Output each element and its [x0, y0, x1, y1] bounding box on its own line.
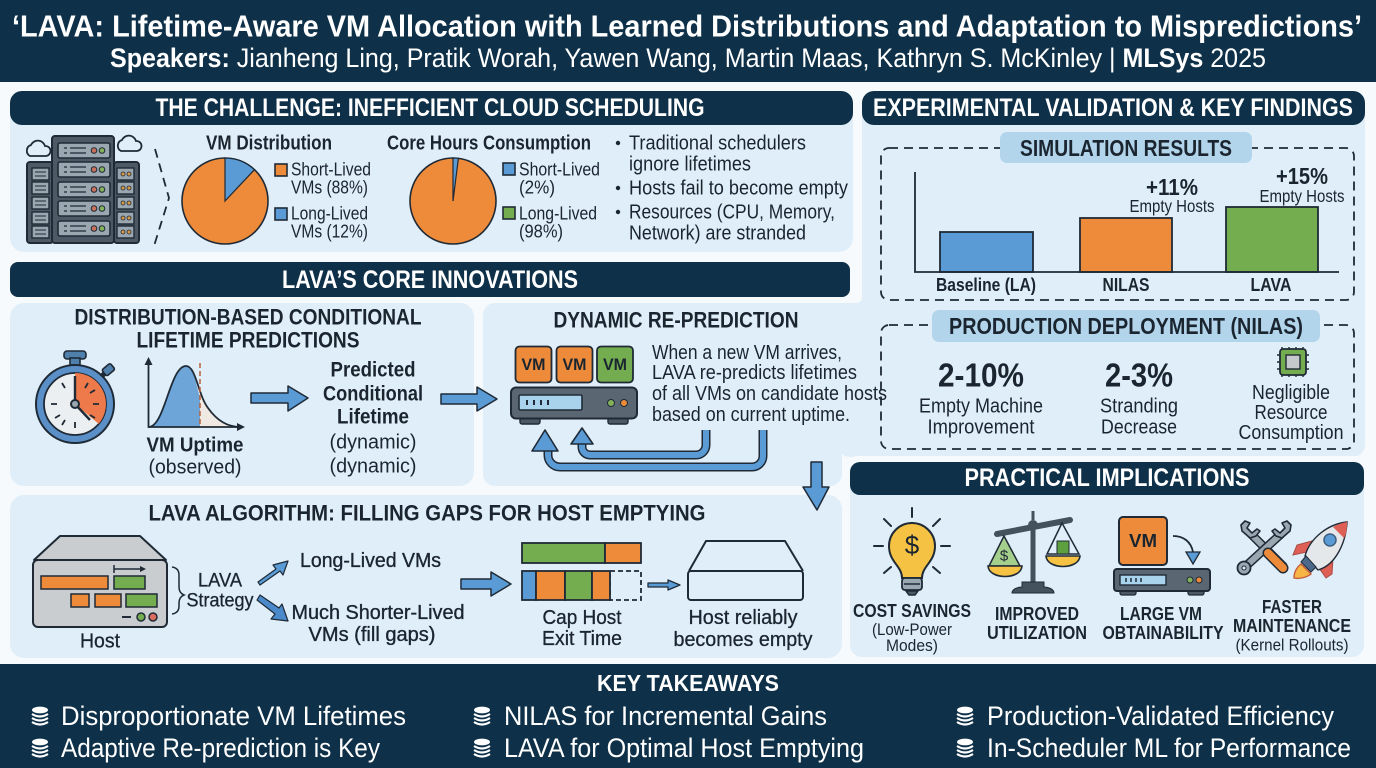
icon: host with allocations [33, 536, 167, 652]
distribution heading [74, 304, 422, 352]
stat: negligible resource consumption [1238, 347, 1344, 444]
chart: lifetime distribution: (observed) [148, 456, 242, 478]
much shorter-lived VMs label: VMs (fill gaps) [308, 624, 436, 646]
item: faster maintenance: FASTER [1262, 597, 1322, 617]
icon: stopwatch [36, 351, 115, 443]
takeaways heading: KEY TAKEAWAYS [597, 670, 779, 696]
item: cost savings [853, 508, 971, 655]
item: cost savings: COST SAVINGS [853, 601, 971, 621]
stat: stranding decrease [1100, 356, 1178, 438]
takeaway column 3: In-Scheduler ML for Performance [987, 733, 1351, 763]
predicted conditional lifetime text: Predicted [330, 358, 416, 382]
distribution heading: LIFETIME PREDICTIONS [136, 328, 360, 352]
challenge bullet list [616, 132, 849, 244]
arrow: to predicted lifetime [251, 386, 308, 411]
bar chart: LAVA [1250, 275, 1292, 295]
re-prediction description: LAVA re-predicts lifetimes [652, 362, 857, 384]
item: faster maintenance [1233, 521, 1351, 654]
takeaway column 3: Production-Validated Efficiency [987, 701, 1334, 731]
chart: lifetime distribution [144, 357, 245, 478]
pie chart: core hours consumption: Core Hours Consumption [387, 132, 591, 154]
panel: practical implications [844, 456, 1370, 664]
pie chart: core hours consumption: (98%) [519, 220, 563, 242]
challenge bullet list: Resources (CPU, Memory, [629, 200, 835, 224]
stat: stranding decrease: Stranding [1100, 394, 1178, 418]
arrow: to shorter-lived [257, 595, 288, 621]
icon: host with VMs: VM [522, 356, 546, 374]
arrow: inner feedback [571, 428, 706, 455]
brace [172, 567, 184, 614]
item: cost savings: $ [905, 530, 920, 560]
LAVA strategy label: Strategy [186, 590, 254, 612]
pie chart: VM distribution: Long-Lived [291, 202, 368, 224]
bar chart [915, 163, 1345, 295]
item: large VM obtainability: LARGE VM [1120, 604, 1202, 624]
pie chart: VM distribution: VMs (88%) [291, 176, 368, 198]
pie chart: VM distribution: Short-Lived [291, 158, 371, 180]
arrow: to empty host [648, 580, 680, 590]
pie chart: VM distribution [182, 132, 371, 244]
item: faster maintenance: (Kernel Rollouts) [1236, 636, 1348, 654]
challenge heading: THE CHALLENGE: INEFFICIENT CLOUD SCHEDULING [156, 94, 704, 122]
item: cost savings: Modes) [886, 637, 938, 655]
icon: host with allocations: Host [80, 630, 120, 652]
item: improved utilization: UTILIZATION [987, 623, 1087, 643]
production deployment frame [881, 310, 1354, 449]
heading: LAVA's core innovations: LAVA’S CORE INNOVATIONS [282, 266, 578, 294]
pie chart: core hours consumption: Short-Lived [519, 158, 600, 180]
bar chart: +15% [1276, 163, 1328, 189]
heading: LAVA's core innovations [10, 262, 850, 297]
much shorter-lived VMs label [292, 602, 464, 646]
arrow: to capped host [461, 572, 511, 596]
bar chart: NILAS [1102, 275, 1150, 295]
icon: empty host: becomes empty [674, 629, 812, 651]
arrow: outer feedback [532, 430, 763, 467]
pie chart: core hours consumption: (2%) [519, 176, 555, 198]
panel: experimental validation [838, 91, 1365, 457]
stat: stranding decrease: 2-3% [1105, 356, 1173, 394]
simulation results frame: SIMULATION RESULTS [1020, 135, 1232, 161]
arrow: to next stage [441, 387, 497, 411]
predicted conditional lifetime text: (dynamic) [330, 454, 416, 478]
long-lived VMs label: Long-Lived VMs [300, 550, 441, 572]
takeaway column 1 [32, 701, 406, 763]
bar chart: Baseline (LA) [936, 275, 1036, 295]
diagram: capped exit time [522, 543, 641, 650]
algorithm heading: LAVA ALGORITHM: FILLING GAPS FOR HOST EMPTYING [148, 500, 706, 526]
distribution heading: DISTRIBUTION-BASED CONDITIONAL [74, 304, 422, 330]
challenge bullet list: Traditional schedulers [629, 132, 806, 154]
icon: host with VMs: VM [562, 356, 586, 374]
stat: empty machine improvement: Improvement [928, 416, 1035, 438]
item: large VM obtainability [1102, 517, 1224, 643]
panel: dynamic re-prediction [483, 303, 887, 486]
bar chart: Empty Hosts [1130, 196, 1215, 216]
item: improved utilization: $ [1000, 548, 1009, 564]
predicted conditional lifetime text [323, 358, 423, 478]
dynamic heading: DYNAMIC RE-PREDICTION [554, 308, 798, 332]
item: cost savings: (Low-Power [872, 621, 952, 639]
dashed chevron [154, 149, 169, 246]
stat: negligible resource consumption: Negligible [1252, 382, 1330, 404]
pie chart: VM distribution: VMs (12%) [291, 220, 368, 242]
challenge bullet list: Hosts fail to become empty [629, 176, 849, 200]
icon: server racks [27, 136, 142, 243]
arrow: to long-lived [258, 561, 288, 585]
icon: empty host: Host reliably [688, 607, 798, 629]
predicted conditional lifetime text: Conditional [323, 382, 423, 406]
pie chart: VM distribution: VM Distribution [206, 132, 332, 154]
predicted conditional lifetime text: Lifetime [337, 406, 409, 428]
re-prediction description: based on current uptime. [652, 404, 850, 426]
LAVA strategy label: LAVA [198, 570, 242, 592]
stat: stranding decrease: Decrease [1101, 416, 1177, 438]
challenge bullet list: Network) are stranded [629, 222, 806, 244]
re-prediction description: When a new VM arrives, [652, 342, 842, 364]
item: large VM obtainability: OBTAINABILITY [1102, 623, 1224, 643]
production deployment frame: PRODUCTION DEPLOYMENT (NILAS) [949, 313, 1303, 339]
icon: empty host [674, 541, 812, 651]
takeaway column 1: Adaptive Re-prediction is Key [61, 733, 380, 763]
challenge bullet list: ignore lifetimes [629, 152, 751, 176]
pie chart: core hours consumption [387, 132, 600, 244]
item: large VM obtainability: VM [1129, 531, 1157, 551]
takeaway column 1: Disproportionate VM Lifetimes [61, 701, 406, 731]
re-prediction description [652, 342, 887, 426]
icon: host with VMs [511, 346, 637, 424]
panel: LAVA algorithm [10, 495, 842, 658]
item: improved utilization: IMPROVED [995, 604, 1079, 624]
pie chart: core hours consumption: Long-Lived [519, 202, 597, 224]
item: improved utilization [987, 511, 1087, 643]
stat: negligible resource consumption: Resource [1254, 402, 1328, 424]
bar chart: Empty Hosts [1260, 186, 1345, 206]
icon: host with VMs: VM [603, 356, 627, 374]
stat: empty machine improvement: 2-10% [938, 356, 1024, 394]
chart: lifetime distribution: VM Uptime [146, 434, 244, 456]
diagram: capped exit time: Cap Host [542, 607, 622, 629]
panel: the challenge [10, 91, 853, 252]
takeaway column 2: LAVA for Optimal Host Emptying [504, 733, 864, 763]
stat: negligible resource consumption: Consumption [1238, 422, 1344, 444]
footer: key takeaways [0, 664, 1376, 768]
takeaway column 2 [474, 701, 864, 763]
implications heading: PRACTICAL IMPLICATIONS [964, 464, 1250, 492]
arrow: down to algorithm [803, 462, 829, 510]
diagram: capped exit time: Exit Time [542, 628, 622, 650]
item: faster maintenance: MAINTENANCE [1233, 616, 1351, 636]
much shorter-lived VMs label: Much Shorter-Lived [292, 602, 464, 624]
re-prediction description: of all VMs on candidate hosts [652, 383, 887, 405]
panel: distribution-based predictions [10, 303, 474, 486]
LAVA strategy label [186, 570, 254, 612]
stat: empty machine improvement: Empty Machine [919, 394, 1043, 418]
header banner [0, 0, 1376, 82]
predicted conditional lifetime text: (dynamic) [330, 430, 416, 454]
stat: empty machine improvement [919, 356, 1043, 438]
bar chart: +11% [1146, 174, 1198, 200]
takeaway column 2: NILAS for Incremental Gains [504, 701, 827, 731]
takeaway column 3 [957, 701, 1351, 763]
simulation results frame [881, 132, 1354, 300]
speakers: Speakers: Jianheng Ling, Pratik Worah, Yawen Wang, Martin Maas, Kathryn S. McKinley | MLSys 2025 [110, 43, 1266, 73]
